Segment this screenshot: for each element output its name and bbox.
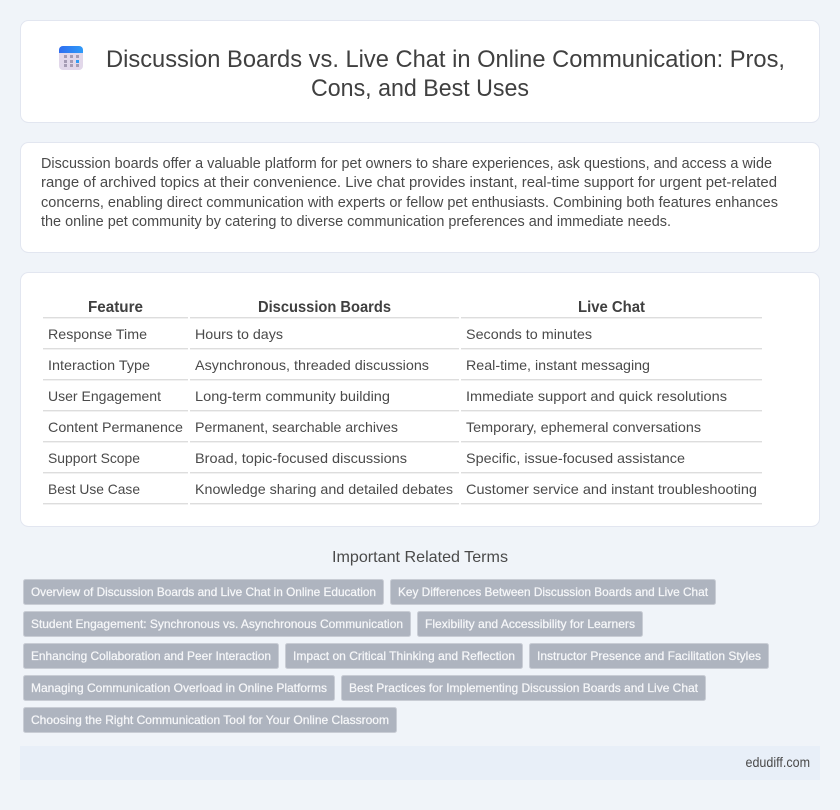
tag	[24, 676, 334, 700]
title: Cons, and Best Uses	[311, 75, 529, 102]
table row: interaction type	[43, 357, 762, 380]
table row: best use case	[43, 481, 762, 504]
title	[106, 46, 785, 102]
footer	[20, 746, 820, 780]
panel: comparison table	[20, 272, 820, 526]
panel: title header	[20, 20, 820, 122]
tag: Student Engagement: Synchronous vs. Asynchronous Communication	[31, 617, 403, 631]
intro paragraph: the online pet community by catering to diverse communication preferences and immediate needs.	[41, 214, 671, 230]
heading: related terms: Important Related Terms	[332, 549, 508, 566]
tag: Key Differences Between Discussion Boards and Live Chat	[398, 585, 709, 599]
table row: user engagement: User Engagement	[48, 388, 161, 404]
table row: interaction type: Real-time, instant messaging	[466, 357, 650, 373]
tag: Overview of Discussion Boards and Live Chat in Online Education	[31, 585, 376, 599]
intro paragraph: range of archived topics at their convenience. Live chat provides instant, real-time support for urgent pet-related	[41, 175, 777, 191]
tag: Best Practices for Implementing Discussion Boards and Live Chat	[349, 681, 699, 695]
table row: response time	[43, 326, 762, 349]
table row: response time: Hours to days	[195, 326, 283, 342]
title: Discussion Boards vs. Live Chat in Online Communication: Pros,	[106, 46, 785, 73]
table row: content permanence: Content Permanence	[48, 419, 183, 435]
table row: content permanence: Permanent, searchable archives	[195, 419, 398, 435]
tag	[24, 708, 396, 732]
intro paragraph: concerns, enabling direct communication with experts or fellow pet enthusiasts. Combining both features enhances	[41, 195, 778, 211]
intro paragraph: Discussion boards offer a valuable platform for pet owners to share experiences, ask questions, and access a wide	[41, 156, 772, 172]
table header row	[43, 299, 762, 318]
table row: support scope: Specific, issue-focused assistance	[466, 450, 685, 466]
table row: user engagement: Long-term community building	[195, 388, 390, 404]
table row: response time: Seconds to minutes	[466, 326, 592, 342]
tag	[390, 580, 716, 604]
intro paragraph	[41, 156, 778, 230]
table row: user engagement	[43, 388, 762, 411]
tag: Instructor Presence and Facilitation Styles	[537, 649, 761, 663]
table row: support scope: Broad, topic-focused discussions	[195, 450, 407, 466]
tag	[286, 644, 522, 668]
tag	[24, 580, 384, 604]
footer: edudiff.com	[746, 754, 810, 770]
tag: Flexibility and Accessibility for Learners	[425, 617, 635, 631]
tag	[418, 612, 642, 636]
table header row: Discussion Boards	[258, 299, 391, 316]
table row: interaction type: Asynchronous, threaded discussions	[195, 357, 429, 373]
table row: best use case: Customer service and instant troubleshooting	[466, 481, 757, 497]
tag: Choosing the Right Communication Tool for Your Online Classroom	[31, 713, 389, 727]
table row: response time: Response Time	[48, 326, 147, 342]
panel: intro text	[20, 142, 820, 252]
table row: content permanence	[43, 419, 762, 442]
table row: best use case: Best Use Case	[48, 481, 140, 497]
icon: calendar	[59, 46, 83, 70]
table header row: Feature	[88, 299, 143, 316]
tag	[24, 612, 410, 636]
table row: user engagement: Immediate support and quick resolutions	[466, 388, 727, 404]
tag	[530, 644, 768, 668]
table row: support scope: Support Scope	[48, 450, 140, 466]
table row: content permanence: Temporary, ephemeral conversations	[466, 419, 701, 435]
tag: Enhancing Collaboration and Peer Interaction	[31, 649, 271, 663]
tag: Impact on Critical Thinking and Reflection	[293, 649, 515, 663]
table row: best use case: Knowledge sharing and detailed debates	[195, 481, 453, 497]
table row: interaction type: Interaction Type	[48, 357, 150, 373]
related terms tags	[24, 580, 768, 732]
tag: Managing Communication Overload in Online Platforms	[31, 681, 327, 695]
table header row: Live Chat	[578, 299, 646, 316]
table row: support scope	[43, 450, 762, 473]
tag	[24, 644, 278, 668]
tag	[342, 676, 706, 700]
